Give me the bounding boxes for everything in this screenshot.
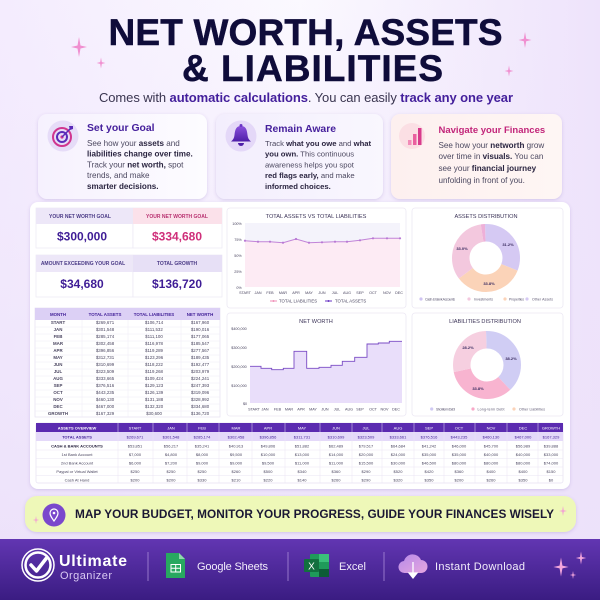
table: monthly totals: $129,123 (145, 383, 164, 388)
logo: Ultimate (59, 553, 127, 570)
total assets row: TOTAL ASSETS (62, 434, 92, 440)
cash and bank accounts row: $46,000 (452, 444, 467, 448)
total assets row: $323,509 (358, 434, 375, 440)
header row: NOV (487, 426, 496, 430)
icon: bar chart (399, 123, 425, 149)
chart: net worth: OCT (369, 408, 378, 412)
cash and bank accounts row: $45,700 (484, 444, 499, 448)
first bank account row: $40,000 (484, 452, 499, 457)
table: monthly totals: TOTAL LIABILITIES (134, 312, 174, 317)
body text: awareness helps you spot (265, 160, 355, 170)
header row: OCT (455, 426, 464, 430)
second bank account row: $74,000 (544, 460, 559, 466)
chart: assets distribution: 31.2% (502, 242, 514, 247)
header row: ASSETS OVERVIEW (58, 426, 97, 430)
header row: FEB (198, 426, 206, 430)
cash at hand row: $290 (362, 478, 371, 482)
table: monthly totals: JUN (54, 362, 62, 367)
second bank account row: $11,000 (295, 460, 310, 466)
table: monthly totals: $111,100 (145, 334, 163, 339)
body text: See how your assets and (87, 139, 180, 148)
panel: navigate your finances (391, 114, 562, 199)
subtitle: Comes with automatic calculations. You can easily track any one year (99, 90, 513, 105)
table: monthly totals: $185,547 (191, 341, 210, 346)
header row: AUG (394, 426, 402, 430)
chart: total assets vs total liabilities: FEB (266, 291, 274, 295)
header row: JAN (167, 426, 175, 430)
icon: google sheets (166, 553, 185, 578)
body text: see your financial journey (438, 164, 537, 173)
legend: Other Assets (532, 297, 553, 301)
table: monthly totals: NET WORTH (187, 312, 213, 317)
body text: trends, and make (87, 171, 150, 180)
chart: assets distribution: 33.0% (456, 246, 468, 251)
cash at hand row: $350 (425, 478, 434, 482)
table: monthly totals: $396,856 (96, 348, 115, 353)
heading: Set your Goal (87, 123, 155, 134)
first bank account row (62, 452, 559, 457)
total assets row: $285,174 (194, 434, 211, 440)
label: google sheets: Google Sheets (197, 561, 268, 573)
table: monthly totals: JAN (54, 327, 62, 332)
KPI: your net worth goal: $300,000 (57, 230, 107, 244)
first bank account row: $40,000 (516, 452, 531, 457)
table: monthly totals: $285,174 (96, 334, 115, 339)
cash at hand row: $330 (198, 478, 207, 482)
chart: net worth (227, 313, 406, 416)
chart: total assets vs total liabilities: 25% (234, 270, 242, 274)
table: monthly totals: $132,320 (145, 404, 164, 409)
second bank account row: $6,000 (129, 460, 142, 466)
total assets row: $443,235 (451, 434, 468, 440)
total assets row: $376,516 (421, 434, 438, 440)
first bank account row: $8,000 (196, 452, 209, 457)
table: monthly totals: $111,532 (145, 327, 163, 332)
table: monthly totals: $460,130 (96, 397, 115, 402)
legend: Investments (474, 297, 493, 301)
chart: total assets vs total liabilities: 75% (234, 238, 242, 242)
cash at hand row: $200 (455, 478, 464, 482)
table: monthly totals: $131,188 (145, 397, 164, 402)
legend: TOTAL ASSETS (335, 298, 366, 304)
first bank account row: $35,000 (422, 452, 437, 457)
chart: net worth: NOV (380, 408, 389, 412)
table: monthly totals: $323,509 (96, 369, 115, 374)
paypal row: $360 (332, 469, 341, 474)
cash and bank accounts row: $79,517 (359, 444, 374, 448)
cash and bank accounts row (51, 444, 559, 448)
KPI: your net worth goal: YOUR NET WORTH GOAL (49, 214, 111, 220)
table: monthly totals: $136,720 (191, 411, 210, 416)
legend: Cash & Bank Accounts (425, 297, 455, 301)
KPI: your net worth: $334,680 (152, 230, 202, 244)
logo: Organizer (60, 570, 112, 582)
header row: START (129, 426, 142, 430)
first bank account row: $20,000 (359, 452, 374, 457)
total assets row (62, 434, 560, 440)
chart: net worth: $300,000 (231, 346, 247, 350)
table: monthly totals: START (51, 320, 65, 325)
table: monthly totals: $301,548 (96, 327, 115, 332)
paypal row: $340 (298, 469, 307, 474)
table: monthly totals: MAY (53, 355, 63, 360)
legend: Properties (509, 297, 524, 301)
second bank account row: $30,000 (391, 460, 406, 466)
paypal row: $400 (487, 469, 496, 474)
KPI: your net worth (133, 208, 222, 248)
chart: net worth: START (248, 408, 261, 412)
KPI: amount exceeding your goal (36, 255, 133, 297)
chart: total assets vs total liabilities: TOTAL ASSETS VS TOTAL LIABILITIES (266, 214, 367, 220)
cash and bank accounts row: $41,242 (422, 444, 437, 448)
table: monthly totals: FEB (54, 334, 62, 339)
body text: Track your net worth, spot (87, 160, 184, 170)
title: & LIABILITIES (182, 48, 443, 89)
header row: MAY (298, 426, 307, 430)
chart: net worth: JAN (262, 408, 269, 412)
chart: assets distribution: 33.8% (483, 281, 495, 286)
chart: net worth: FEB (274, 408, 282, 412)
table: monthly totals: $443,235 (96, 390, 115, 395)
title (108, 12, 502, 89)
chart: net worth: AUG (345, 408, 353, 412)
chart: total assets vs total liabilities: DEC (395, 291, 403, 295)
chart: total assets vs total liabilities (227, 208, 406, 308)
total assets row: $333,661 (390, 434, 407, 440)
table: monthly totals: JUL (54, 369, 62, 374)
chart: net worth: JUL (334, 408, 340, 412)
cash at hand row: $320 (394, 478, 403, 482)
total assets row: $167,329 (543, 434, 560, 440)
body text: unfolding in front of you. (438, 176, 525, 185)
body text (265, 139, 372, 191)
second bank account row: $9,500 (262, 460, 275, 466)
panel: remain aware (216, 114, 383, 199)
table: monthly totals: NOV (53, 397, 63, 402)
second bank account row: 2nd Bank Account (61, 460, 94, 466)
table: monthly totals: $192,477 (191, 362, 210, 367)
logo (22, 549, 127, 582)
cash at hand row: $260 (332, 478, 341, 482)
chart: net worth: $400,000 (231, 327, 247, 331)
paypal row: $250 (167, 469, 176, 474)
cash and bank accounts row: $53,851 (128, 444, 143, 448)
chart: total assets vs total liabilities: MAR (279, 291, 287, 295)
table: monthly totals: $310,699 (96, 362, 115, 367)
table: assets overview (36, 423, 563, 483)
second bank account row: $80,000 (484, 460, 499, 466)
cash and bank accounts row: $56,217 (164, 444, 179, 448)
chart: total assets vs total liabilities: NOV (383, 291, 392, 295)
header row: SEP (425, 426, 433, 430)
table: monthly totals: $167,960 (191, 320, 210, 325)
table: monthly totals: TOTAL ASSETS (89, 312, 121, 317)
label: instant download: Instant Download (435, 561, 525, 573)
chart: total assets vs total liabilities: AUG (343, 291, 351, 295)
cash at hand row: $350 (519, 478, 528, 482)
body text: smarter decisions. (87, 182, 159, 191)
table: monthly totals: $119,289 (145, 348, 164, 353)
body text: over time in visuals. You can (438, 152, 543, 161)
table: monthly totals: $467,000 (96, 404, 115, 409)
chart: net worth: $0 (243, 402, 247, 406)
total assets row: $310,699 (328, 434, 345, 440)
paypal row: $520 (394, 469, 403, 474)
first bank account row: $7,000 (129, 452, 142, 457)
table: monthly totals: $30,600 (146, 411, 162, 416)
first bank account row: $14,000 (329, 452, 344, 457)
first bank account row: $33,000 (544, 452, 559, 457)
cash at hand row: $220 (264, 478, 273, 482)
table: monthly totals: SEP (54, 383, 62, 388)
chart: total assets vs total liabilities: 100% (232, 222, 242, 226)
KPI: amount exceeding your goal: $34,680 (60, 277, 104, 291)
cash at hand row: $210 (232, 478, 241, 482)
label: excel: Excel (339, 561, 366, 573)
table: monthly totals: $224,241 (191, 376, 210, 381)
table: monthly totals: $167,329 (96, 411, 115, 416)
table: monthly totals: AUG (53, 376, 63, 381)
paypal row: $250 (131, 469, 140, 474)
total assets row: $269,671 (127, 434, 144, 440)
paypal row: $400 (519, 469, 528, 474)
paypal row: $150 (547, 469, 556, 474)
first bank account row: 1st Bank Account (62, 452, 93, 457)
paypal row: $420 (425, 469, 434, 474)
table: monthly totals: $328,992 (191, 397, 210, 402)
total assets row: $302,458 (228, 434, 245, 440)
chart: total assets vs total liabilities: JUL (332, 291, 338, 295)
paypal row (56, 469, 556, 474)
first bank account row: $35,000 (452, 452, 467, 457)
second bank account row: $80,000 (452, 460, 467, 466)
table: monthly totals: DEC (53, 404, 63, 409)
second bank account row: $80,000 (516, 460, 531, 466)
table: monthly totals: GROWTH (48, 411, 68, 416)
cash and bank accounts row: $49,806 (261, 444, 276, 448)
body text: liabilities change over time. (87, 150, 193, 158)
chart: total assets vs total liabilities: START (239, 291, 252, 295)
body text: red flags early, and make (265, 171, 355, 180)
paypal row: $290 (362, 469, 371, 474)
first bank account row: $4,800 (165, 452, 178, 457)
banner sparkles (33, 506, 567, 524)
panel: set your goal (38, 114, 207, 199)
icon: excel (304, 554, 329, 577)
second bank account row: $15,500 (359, 460, 374, 466)
chart: net worth: JUN (321, 408, 329, 412)
cash at hand row: $0 (549, 478, 554, 482)
KPI: total growth: $136,720 (152, 277, 202, 291)
cash and bank accounts row: $56,989 (516, 444, 531, 448)
KPI: total growth (133, 255, 222, 297)
body text: you own. This continuous (265, 150, 354, 158)
legend (270, 298, 366, 304)
total assets row: $460,130 (483, 434, 500, 440)
table: monthly totals: $126,139 (145, 390, 164, 395)
KPI: amount exceeding your goal: AMOUNT EXCEEDING YOUR GOAL (41, 261, 125, 267)
table: monthly totals: MAR (53, 341, 64, 346)
chart: liabilities distribution: LIABILITIES DISTRIBUTION (449, 319, 521, 325)
dividers (148, 552, 384, 581)
cash at hand row: $140 (298, 478, 307, 482)
total assets row: $311,731 (294, 434, 311, 440)
table: monthly totals: $376,516 (96, 383, 115, 388)
icon: excel: X (308, 562, 315, 572)
header row: GROWTH (542, 426, 560, 430)
chart: total assets vs total liabilities: JAN (255, 291, 262, 295)
chart: liabilities distribution: 28.2% (462, 345, 474, 350)
table: monthly totals: $333,665 (96, 376, 115, 381)
cash at hand row: $200 (131, 478, 140, 482)
first bank account row: $13,000 (295, 452, 310, 457)
table: monthly totals: $116,978 (145, 341, 164, 346)
panel: dashboard (30, 202, 570, 489)
chart: liabilities distribution (412, 313, 563, 416)
paypal row: $250 (198, 469, 207, 474)
total assets row: $396,856 (260, 434, 277, 440)
first bank account row: $10,000 (261, 452, 276, 457)
body text (438, 141, 544, 185)
legend: TOTAL LIABILITIES (279, 298, 317, 304)
banner (25, 496, 576, 532)
cash and bank accounts row: $62,489 (329, 444, 344, 448)
icon: map pin (42, 504, 66, 526)
chart: assets distribution (412, 208, 563, 308)
KPI: your net worth: YOUR NET WORTH GOAL (146, 214, 208, 220)
header row: DEC (519, 426, 527, 430)
table: monthly totals: $109,424 (145, 376, 164, 381)
table: monthly totals: $302,458 (96, 341, 115, 346)
cash at hand row: $260 (487, 478, 496, 482)
icon: bell (226, 120, 256, 152)
chart: net worth: $100,000 (231, 384, 247, 388)
table: monthly totals: $334,680 (191, 404, 210, 409)
chart: total assets vs total liabilities: 0% (236, 286, 242, 290)
title: NET WORTH, ASSETS (108, 12, 502, 53)
second bank account row: $7,200 (165, 460, 178, 466)
cash and bank accounts row: $64,684 (391, 444, 406, 448)
cash at hand row: Cash At Hand (65, 478, 89, 482)
table: monthly totals: $312,731 (96, 355, 115, 360)
chart: assets distribution: ASSETS DISTRIBUTION (454, 214, 518, 220)
second bank account row: $9,000 (196, 460, 209, 466)
body text: Track what you owe and what (265, 139, 372, 148)
footer sparkles (553, 552, 586, 579)
table: monthly totals: $123,296 (145, 355, 164, 360)
table: monthly totals: $269,671 (96, 320, 115, 325)
total assets row: $301,548 (163, 434, 180, 440)
icon: download cloud (398, 554, 428, 578)
table: monthly totals: $119,268 (145, 369, 164, 374)
chart: net worth: MAR (285, 408, 293, 412)
heading: Remain Aware (265, 124, 336, 135)
table: monthly totals: $189,435 (191, 355, 210, 360)
table: monthly totals: $319,096 (191, 390, 210, 395)
table: monthly totals: $177,065 (191, 334, 210, 339)
paypal row: Paypal or Virtual Wallet (56, 469, 99, 474)
paypal row: $500 (264, 469, 273, 474)
icon: target (48, 120, 78, 152)
KPI: your net worth goal (36, 208, 133, 248)
chart: total assets vs total liabilities: SEP (356, 291, 364, 295)
paypal row: $260 (232, 469, 241, 474)
table: monthly totals: OCT (53, 390, 63, 395)
chart: total assets vs total liabilities: MAY (305, 291, 313, 295)
second bank account row: $46,500 (422, 460, 437, 466)
second bank account row: $9,000 (230, 460, 243, 466)
cash at hand row (65, 478, 554, 482)
chart: net worth: MAY (309, 408, 317, 412)
second bank account row (61, 460, 559, 466)
cash and bank accounts row: CASH & BANK ACCOUNTS (51, 444, 103, 448)
chart: total assets vs total liabilities: APR (292, 291, 300, 295)
cash and bank accounts row: $51,882 (295, 444, 310, 448)
table: monthly totals: $190,016 (191, 327, 210, 332)
body text: See how your networth grow (438, 141, 544, 150)
header row: JUL (362, 426, 370, 430)
legend: Other Liabilities (519, 407, 545, 411)
body text: informed choices. (265, 182, 331, 191)
table: monthly totals: $118,222 (145, 362, 164, 367)
chart: net worth: DEC (392, 408, 400, 412)
header row: APR (264, 426, 272, 430)
table: monthly totals: MONTH (50, 312, 66, 317)
cash and bank accounts row: $35,241 (195, 444, 210, 448)
sparkles around the title (71, 32, 531, 76)
first bank account row: $9,500 (230, 452, 243, 457)
legend (430, 407, 545, 411)
second bank account row: $11,000 (329, 460, 344, 466)
total assets row: $467,000 (515, 434, 532, 440)
chart: net worth: APR (297, 408, 305, 412)
table: monthly totals (35, 308, 220, 417)
first bank account row: $24,000 (391, 452, 406, 457)
footer (0, 539, 600, 600)
table: monthly totals: $247,393 (191, 383, 210, 388)
legend: Short-term Debt (436, 407, 455, 411)
body text (87, 139, 193, 191)
table: monthly totals: $106,714 (145, 320, 164, 325)
legend: Long-term Debt (478, 407, 505, 411)
table: monthly totals: $277,567 (191, 348, 210, 353)
paypal row: $360 (455, 469, 464, 474)
chart: net worth: SEP (356, 408, 364, 412)
header row: MAR (232, 426, 241, 430)
table: monthly totals: APR (53, 348, 63, 353)
cash and bank accounts row: $40,913 (229, 444, 244, 448)
chart: total assets vs total liabilities: OCT (369, 291, 378, 295)
chart: liabilities distribution: 33.8% (472, 386, 484, 391)
header row (58, 426, 560, 430)
KPI: total growth: TOTAL GROWTH (157, 261, 198, 267)
cash at hand row: $200 (167, 478, 176, 482)
heading: Navigate your Finances (438, 125, 545, 136)
cash and bank accounts row: $39,888 (544, 444, 559, 448)
table: monthly totals: $203,979 (191, 369, 210, 374)
chart: net worth: NET WORTH (299, 319, 333, 325)
header row: JUN (332, 426, 340, 430)
chart: total assets vs total liabilities: JUN (318, 291, 326, 295)
legend (419, 297, 553, 301)
chart: total assets vs total liabilities: 50% (234, 254, 242, 258)
chart: liabilities distribution: 38.2% (505, 356, 517, 361)
chart: net worth: $200,000 (231, 365, 247, 369)
banner text: MAP YOUR BUDGET, MONITOR YOUR PROGRESS, GUIDE YOUR FINANCES WISELY (75, 507, 554, 521)
